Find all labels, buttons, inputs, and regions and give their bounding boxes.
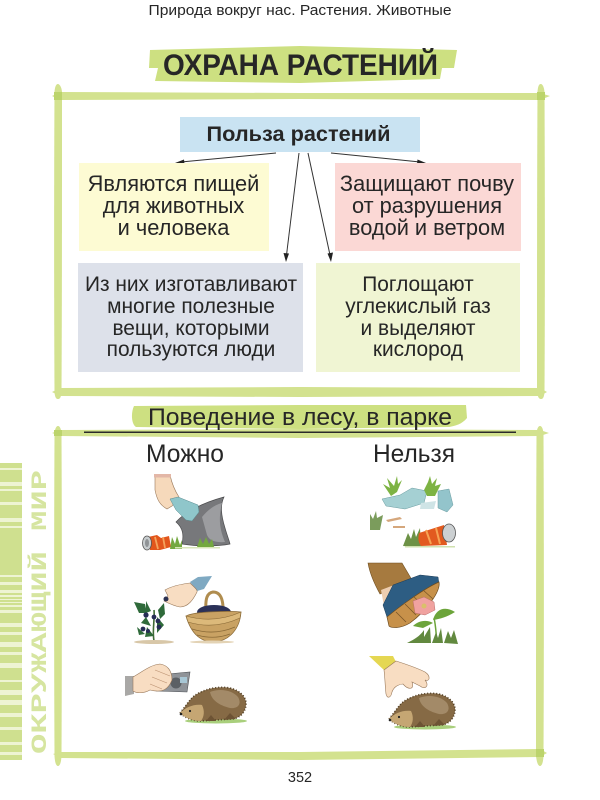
panel: behaviour frame: [52, 426, 549, 766]
arrow: to soil box: [331, 153, 426, 164]
box: absorb carbon dioxide: [316, 263, 520, 372]
arrow: to useful things box: [284, 153, 299, 262]
box: food for animals and people: [79, 163, 269, 251]
box: protect soil: водой и ветром: [349, 215, 505, 240]
icon: picking berries: [134, 576, 241, 644]
icon: boot stepping on a flower: [368, 563, 458, 644]
box: protect soil: от разрушения: [352, 193, 502, 218]
box: protect soil: Защищают почву: [340, 171, 514, 196]
heading: behaviour in forest and park: Поведение в лесу, в парке: [148, 404, 452, 431]
box: absorb carbon dioxide: кислород: [373, 338, 463, 361]
arrow: to food box: [175, 153, 276, 164]
box: food for animals and people: Являются пищей: [88, 171, 259, 196]
box: food for animals and people: для животных: [103, 193, 244, 218]
column heading: allowed: Можно: [146, 440, 224, 468]
icon: photographing a hedgehog: [125, 664, 247, 724]
title: ОХРАНА РАСТЕНИЙ: [163, 48, 438, 82]
icon: putting trash in a bag: [142, 474, 230, 550]
panel: plant benefits frame: [52, 84, 550, 399]
sidebar: decorative barcode stripes: [0, 463, 22, 760]
heading box: Польза растений: Польза растений: [206, 122, 390, 146]
box: protect soil: [335, 163, 521, 251]
page header: Природа вокруг нас. Растения. Животные: [148, 3, 452, 19]
box: useful things: [78, 263, 303, 372]
page number: 352: [288, 770, 312, 786]
sidebar: vertical section label: ОКРУЖАЮЩИЙ МИР: [27, 470, 53, 754]
column heading: forbidden: Нельзя: [373, 440, 455, 468]
box: food for animals and people: и человека: [118, 215, 230, 240]
arrow: to oxygen box: [308, 153, 333, 262]
heading: behaviour in forest and park: [84, 404, 516, 433]
box: useful things: вещи, которыми: [112, 317, 270, 340]
box: useful things: Из них изготавливают: [85, 273, 297, 296]
icon: hand reaching for a hedgehog: [369, 656, 456, 730]
box: useful things: многие полезные: [107, 295, 275, 318]
heading box: Польза растений: [180, 117, 420, 152]
icon: broken bottle and litter: [370, 476, 456, 548]
box: absorb carbon dioxide: Поглощают: [362, 273, 474, 296]
box: useful things: пользуются люди: [107, 338, 275, 361]
box: absorb carbon dioxide: и выделяют: [361, 317, 476, 340]
box: absorb carbon dioxide: углекислый газ: [345, 295, 491, 318]
